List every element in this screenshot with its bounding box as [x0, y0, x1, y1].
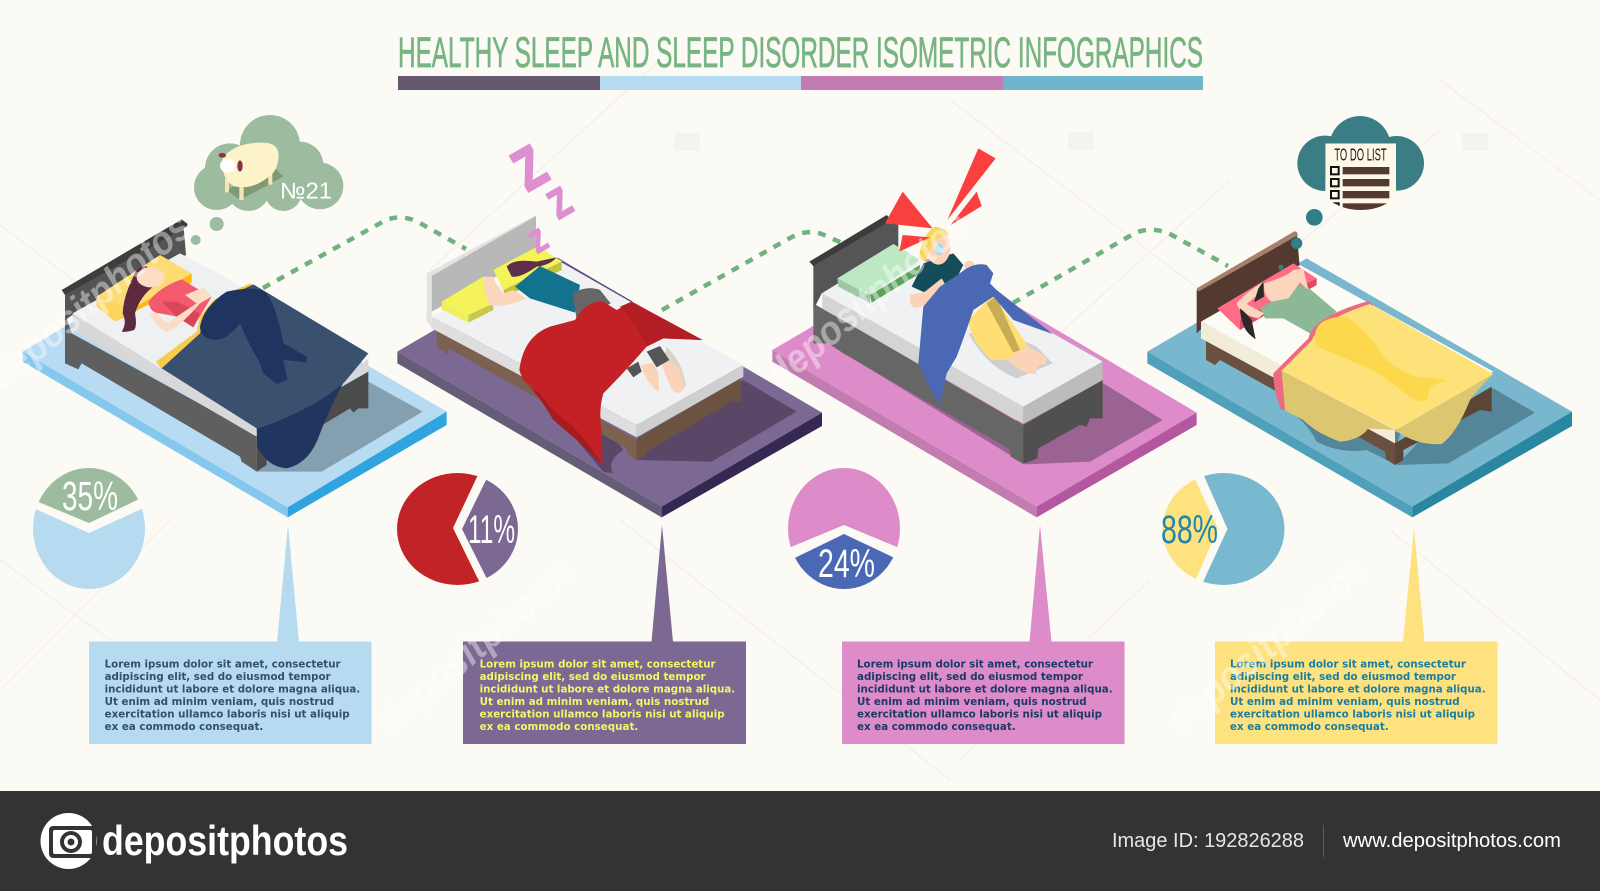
footer url: www.depositphotos.com — [1342, 830, 1561, 852]
platform 4 — [1147, 258, 1572, 517]
callout 2 — [463, 525, 746, 744]
dashed connector lines — [263, 217, 1228, 310]
person sitting up — [910, 227, 1053, 378]
callout 3 — [842, 525, 1124, 744]
callout 4: incididunt ut labore et dolore magna aliqua. — [1230, 683, 1486, 695]
callout 2: incididunt ut labore et dolore magna aliqua. — [480, 683, 735, 695]
paper list — [1325, 143, 1396, 212]
panel: startled awake bed — [772, 148, 1197, 517]
woman sleeping — [122, 266, 212, 332]
pie chart 35%: 35% — [62, 473, 118, 519]
icon: sheep — [219, 143, 283, 200]
callout 2: Ut enim ad minim veniam, quis nostrud — [480, 696, 709, 708]
callout 1: adipiscing elit, sed do eiusmod tempor — [105, 671, 331, 683]
watermarks: depositphotos — [1158, 547, 1377, 742]
pie chart 24% — [788, 468, 900, 589]
woman arms behind head — [1237, 268, 1337, 339]
pillows 2 — [442, 246, 562, 323]
callout 3: Lorem ipsum dolor sit amet, consectetur — [857, 658, 1094, 670]
callout 4 — [1215, 528, 1498, 744]
footer logo icon — [40, 813, 96, 869]
platform 2 — [397, 258, 822, 517]
snoring letters: Z — [501, 133, 557, 203]
pie chart 88% — [1161, 473, 1284, 585]
pillow 4 — [1217, 263, 1317, 330]
blanket: blue — [918, 264, 1053, 405]
callout 2: exercitation ullamco laboris nisi ut aliquip — [480, 708, 725, 720]
pie chart 11%: 11% — [468, 508, 515, 552]
callout 2: ex ea commodo consequat. — [480, 721, 638, 733]
callout 3: adipiscing elit, sed do eiusmod tempor — [857, 671, 1084, 683]
blanket: navy — [156, 283, 368, 468]
thought cloud: counting sheep — [191, 115, 343, 245]
watermarks: depositphotos — [758, 202, 977, 397]
panel: restless sleep bed — [397, 133, 822, 517]
snoring letters: Z — [523, 222, 554, 259]
callout 3: ex ea commodo consequat. — [857, 721, 1016, 733]
callout 2: Lorem ipsum dolor sit amet, consectetur — [480, 658, 716, 670]
bed frame 1 — [62, 219, 368, 472]
callout 1: ex ea commodo consequat. — [105, 721, 263, 733]
platform 3 — [772, 256, 1197, 517]
platform 1 — [23, 257, 447, 517]
watermarks — [0, 202, 1377, 742]
title colour bar — [398, 76, 1203, 90]
callout 4: adipiscing elit, sed do eiusmod tempor — [1230, 671, 1457, 683]
snoring letters: Z — [540, 178, 579, 227]
callout 2: adipiscing elit, sed do eiusmod tempor — [480, 671, 706, 683]
callout 1 — [89, 525, 372, 744]
callout 1: Ut enim ad minim veniam, quis nostrud — [105, 696, 334, 708]
pie chart 11% — [397, 473, 518, 585]
pie chart 24%: 24% — [818, 542, 875, 586]
bed back edge line — [562, 262, 632, 302]
bed 3 — [809, 215, 1103, 464]
pie chart 35% — [33, 468, 145, 589]
watermarks: depositphotos — [368, 547, 587, 742]
list heading: TO DO LIST — [1334, 145, 1387, 165]
callout 3: exercitation ullamco laboris nisi ut aliquip — [857, 708, 1102, 720]
bed 2 — [427, 215, 743, 461]
callout 1: Lorem ipsum dolor sit amet, consectetur — [105, 658, 341, 670]
callout 1: incididunt ut labore et dolore magna aliqua. — [105, 683, 360, 695]
callout 4: Lorem ipsum dolor sit amet, consectetur — [1230, 658, 1467, 670]
blanket: yellow — [1273, 301, 1493, 444]
callout 4: Ut enim ad minim veniam, quis nostrud — [1230, 696, 1460, 708]
callout 3: Ut enim ad minim veniam, quis nostrud — [857, 696, 1087, 708]
callout 1: exercitation ullamco laboris nisi ut aliquip — [105, 708, 350, 720]
callout 4: exercitation ullamco laboris nisi ut aliquip — [1230, 708, 1475, 720]
footer image id: Image ID: 192826288 — [1112, 830, 1304, 852]
blanket: red — [519, 302, 703, 465]
panel: worrying insomnia bed — [1147, 116, 1572, 517]
pie chart 88%: 88% — [1161, 508, 1218, 552]
callout 3: incididunt ut labore et dolore magna aliqua. — [857, 683, 1113, 695]
feet — [627, 346, 686, 393]
thought cloud: to do list — [1278, 116, 1424, 270]
pillow 1 — [97, 255, 192, 322]
snoring letters — [501, 133, 579, 259]
callout 4: ex ea commodo consequat. — [1230, 721, 1389, 733]
person lying face down — [483, 257, 611, 320]
footer brand name: depositphotos — [102, 817, 348, 864]
footer bar — [0, 791, 1600, 891]
cloud label: №21 — [280, 178, 332, 204]
pillow 3 — [837, 244, 920, 303]
panel: healthy sleep bed — [23, 115, 447, 517]
alarm burst marks — [885, 148, 996, 252]
bed 4 — [1197, 231, 1493, 465]
